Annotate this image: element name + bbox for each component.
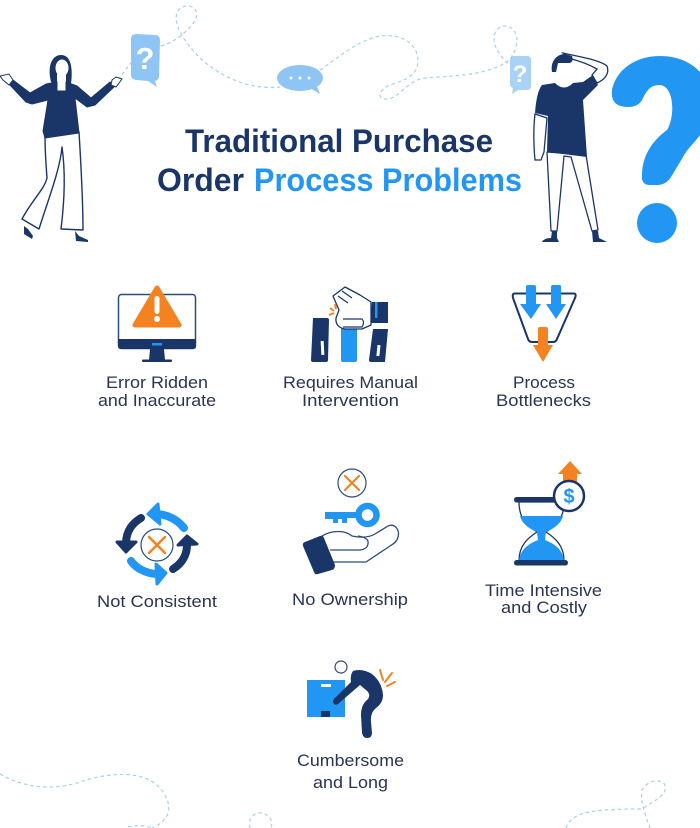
icon: hand with key (303, 469, 398, 574)
man head (556, 59, 571, 79)
label: and Costly (501, 598, 588, 617)
item: cumbersome (297, 661, 404, 792)
label: No Ownership (292, 590, 408, 609)
label: Cumbersome (297, 751, 404, 770)
icon: man scratching head (534, 53, 608, 242)
item: not consistent (97, 504, 217, 611)
label: Error Ridden (106, 373, 208, 392)
title: Process Problems (254, 162, 522, 198)
item: error ridden (98, 288, 216, 410)
label: Not Consistent (97, 592, 217, 611)
title: Traditional Purchase (185, 123, 493, 159)
icon: funnel arrows (513, 285, 576, 362)
label (283, 373, 418, 410)
icon: question bubble right: ? (513, 61, 527, 88)
man arms (534, 114, 547, 160)
icon: cycle arrows with cross (117, 504, 197, 584)
label: Intervention (302, 391, 399, 410)
icon: woman shrugging (0, 55, 122, 242)
item: time intensive (485, 461, 602, 617)
icon: speech bubble (277, 65, 323, 94)
icon: question bubble left: ? (136, 41, 154, 76)
title: Order (157, 162, 244, 198)
label: and Long (313, 773, 388, 792)
label: Process (513, 373, 575, 392)
label (98, 373, 216, 410)
label (496, 373, 591, 410)
icon: hand moving blocks (311, 287, 388, 362)
item: no ownership (292, 469, 408, 609)
icon: question bubble left (131, 34, 160, 87)
icon: big question mark (612, 56, 700, 243)
woman trousers (22, 132, 83, 230)
title (157, 123, 522, 198)
icon: question bubble right (510, 56, 531, 94)
item: manual intervention (283, 287, 418, 410)
icon: person lifting box (307, 661, 395, 738)
label (297, 751, 404, 792)
icon: monitor warning (118, 288, 196, 362)
woman top (9, 80, 115, 138)
man trousers (547, 152, 598, 231)
man shirt (535, 75, 598, 157)
label (485, 581, 602, 617)
label: Bottlenecks (496, 391, 591, 410)
icon: hourglass with dollar: $ (563, 486, 575, 508)
label: Requires Manual (283, 373, 418, 392)
item: process bottlenecks (496, 285, 591, 410)
label: and Inaccurate (98, 391, 216, 410)
icon: hourglass with dollar (514, 461, 584, 566)
woman hair (50, 55, 72, 84)
label: Time Intensive (485, 581, 602, 600)
